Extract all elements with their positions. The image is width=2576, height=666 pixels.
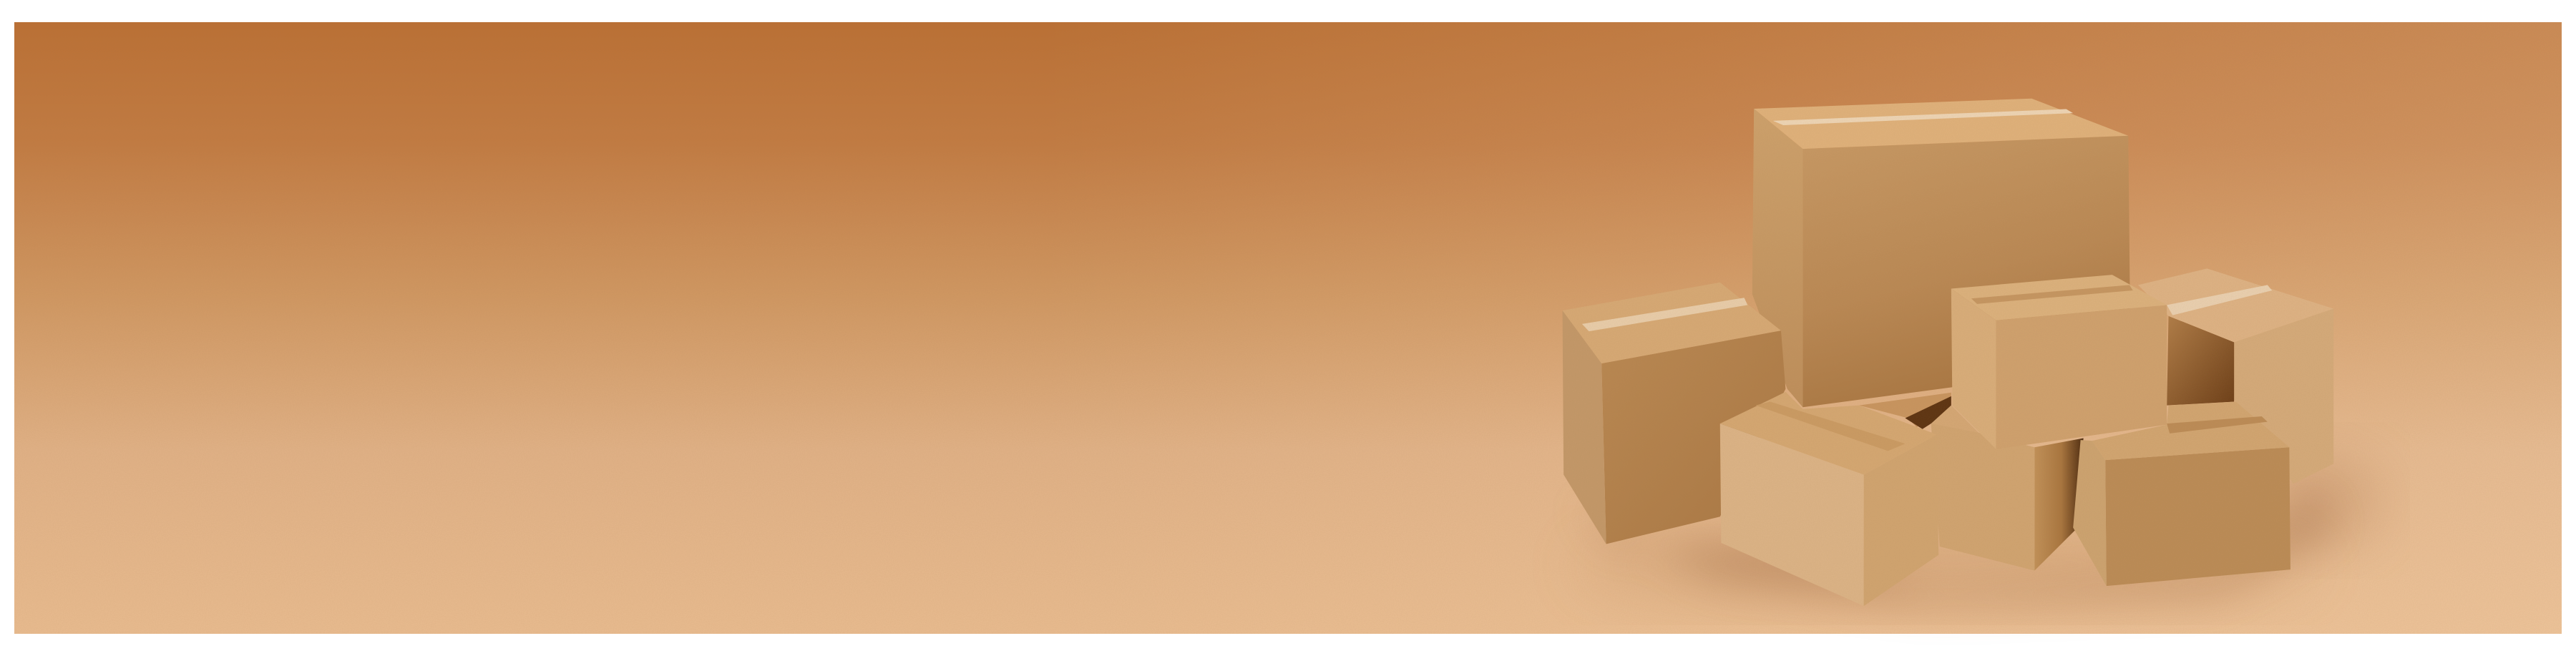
box: top centre — [1951, 275, 2167, 449]
box: large rear box — [1752, 99, 2131, 407]
floor shadow under boxes — [1574, 465, 2376, 604]
box: front middle — [1720, 392, 1938, 606]
box: back right — [2138, 268, 2333, 484]
group of cardboard boxes — [1563, 99, 2333, 606]
box: centre lower — [1859, 393, 2084, 571]
box: front right — [2073, 402, 2290, 586]
box: left — [1563, 283, 1785, 544]
